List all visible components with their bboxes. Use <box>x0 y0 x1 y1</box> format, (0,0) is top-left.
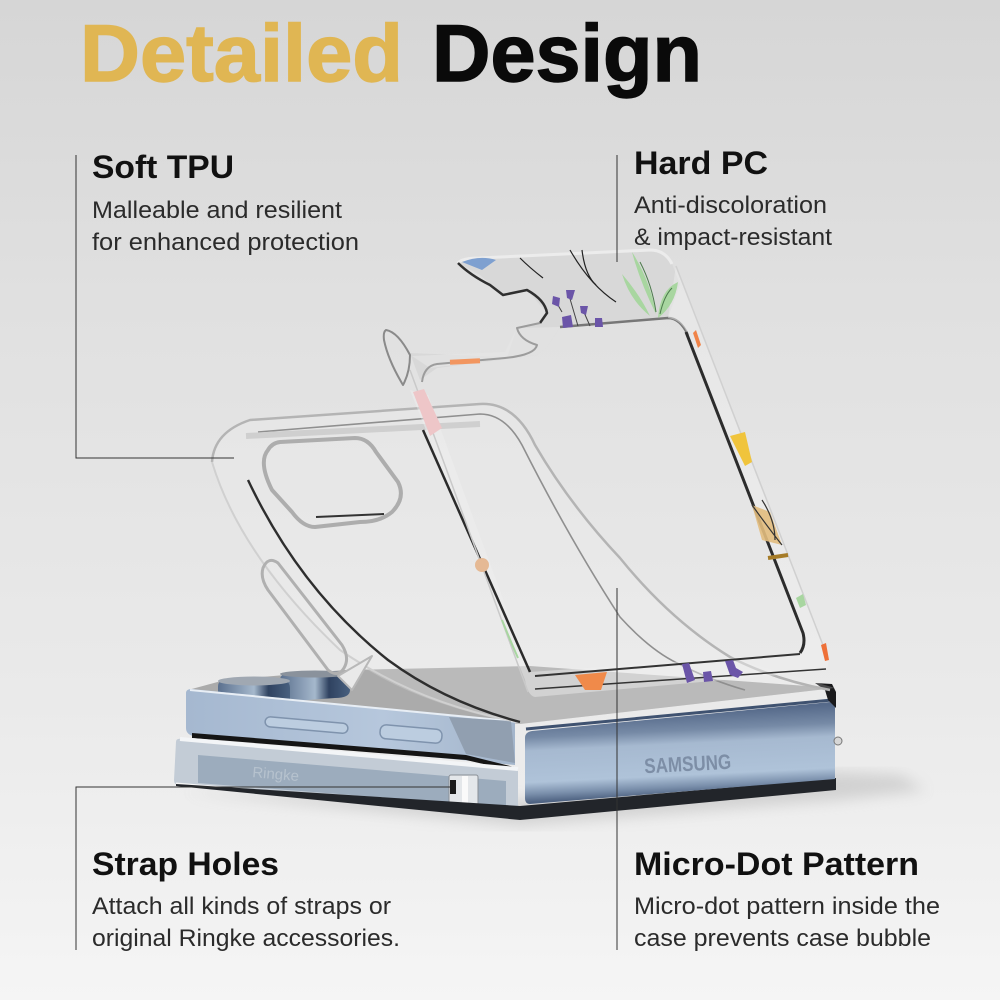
TPU outer edge <box>212 404 830 690</box>
orange accent right <box>693 330 701 348</box>
power button <box>380 724 442 744</box>
camera lenses <box>218 670 350 704</box>
hinge base shadow <box>176 778 836 820</box>
callout: Micro-Dot Pattern: case prevents case bubble <box>634 925 931 952</box>
hinge right corner <box>815 683 836 708</box>
branches <box>520 250 616 302</box>
micro-dot panel <box>198 755 506 807</box>
callout: Strap Holes: original Ringke accessories. <box>92 925 400 952</box>
PC left dark edge <box>423 430 530 672</box>
volume button <box>265 716 348 734</box>
callout: Strap Holes: Attach all kinds of straps or <box>92 893 391 920</box>
PC frame fill <box>410 266 828 697</box>
callout: Strap Holes: Strap Holes <box>92 846 279 882</box>
floral print <box>413 250 829 690</box>
PC tab edge <box>422 323 540 382</box>
illustration: phone and clear case <box>174 250 925 826</box>
camera cutout <box>264 438 401 527</box>
title <box>80 9 702 99</box>
orange stripe <box>450 358 480 365</box>
red tip right <box>821 643 829 661</box>
PC left outer edge <box>410 370 528 692</box>
button slot <box>262 560 347 674</box>
callout: Micro-Dot Pattern: Micro-Dot Pattern <box>634 846 919 882</box>
bottom orange flower <box>575 672 607 690</box>
lower white edge <box>176 784 518 818</box>
PC top panel edge <box>458 250 672 264</box>
callout: Hard PC: & impact-resistant <box>634 224 832 251</box>
TPU case <box>212 404 835 724</box>
PC tip loop <box>384 330 410 385</box>
SAMSUNG logo: SAMSUNG <box>644 751 732 778</box>
callout: Hard PC <box>634 145 832 251</box>
blue flower <box>462 258 496 270</box>
tan flower <box>752 505 782 545</box>
callout: Hard PC: Anti-discoloration <box>634 192 827 219</box>
title: Detailed <box>80 9 403 99</box>
yellow flower <box>730 432 752 466</box>
leader line: Hard PC <box>616 155 618 262</box>
hard PC case <box>384 250 828 697</box>
PC top panel <box>410 250 680 380</box>
leader line: Strap Holes <box>76 787 450 950</box>
pink flower <box>413 389 442 436</box>
small orange flower <box>475 558 489 572</box>
callout: Micro-Dot Pattern: Micro-dot pattern inside the <box>634 893 940 920</box>
callout: Micro-Dot Pattern <box>634 846 940 952</box>
TPU translucent fill <box>212 404 835 724</box>
title: Design <box>432 9 702 99</box>
PC notch edges <box>458 263 547 323</box>
phone upper top surface <box>188 666 835 724</box>
callout: Hard PC: Hard PC <box>634 145 768 181</box>
TPU inner glossy edge <box>212 462 520 722</box>
TPU lower corner <box>338 656 372 690</box>
bottom lavender <box>682 660 743 683</box>
lavender <box>555 292 590 326</box>
TPU top double line <box>246 424 480 436</box>
leader line: Soft TPU <box>76 155 234 458</box>
PC bottom inner line <box>535 654 800 676</box>
PC tab fill <box>412 327 560 368</box>
green stem <box>502 620 518 658</box>
green leaves <box>622 252 678 318</box>
PC inner top edge <box>560 318 688 335</box>
case logo text: Ringke <box>252 764 300 785</box>
PC right inner dark edge <box>686 332 804 653</box>
floor shadow <box>185 772 925 826</box>
PC right outer edge <box>676 266 828 658</box>
callout: Soft TPU: Malleable and resilient <box>92 197 342 224</box>
callout: Soft TPU: Soft TPU <box>92 149 234 185</box>
callout: Soft TPU: for enhanced protection <box>92 229 359 256</box>
TPU inner dark edge <box>248 480 520 722</box>
leader line: Micro-Dot Pattern <box>616 588 618 950</box>
gap between halves <box>192 733 518 772</box>
case overlay on side <box>449 717 515 763</box>
PC bottom outer line <box>535 669 826 689</box>
strap hole <box>449 775 478 805</box>
green leaf right <box>796 594 806 608</box>
phone upper side <box>186 689 515 765</box>
phone lower half in case <box>174 739 518 815</box>
side pin <box>834 737 842 745</box>
hinge <box>525 702 835 804</box>
callout: Strap Holes <box>92 846 400 952</box>
TPU inner band <box>258 414 745 690</box>
callout: Soft TPU <box>92 149 359 256</box>
